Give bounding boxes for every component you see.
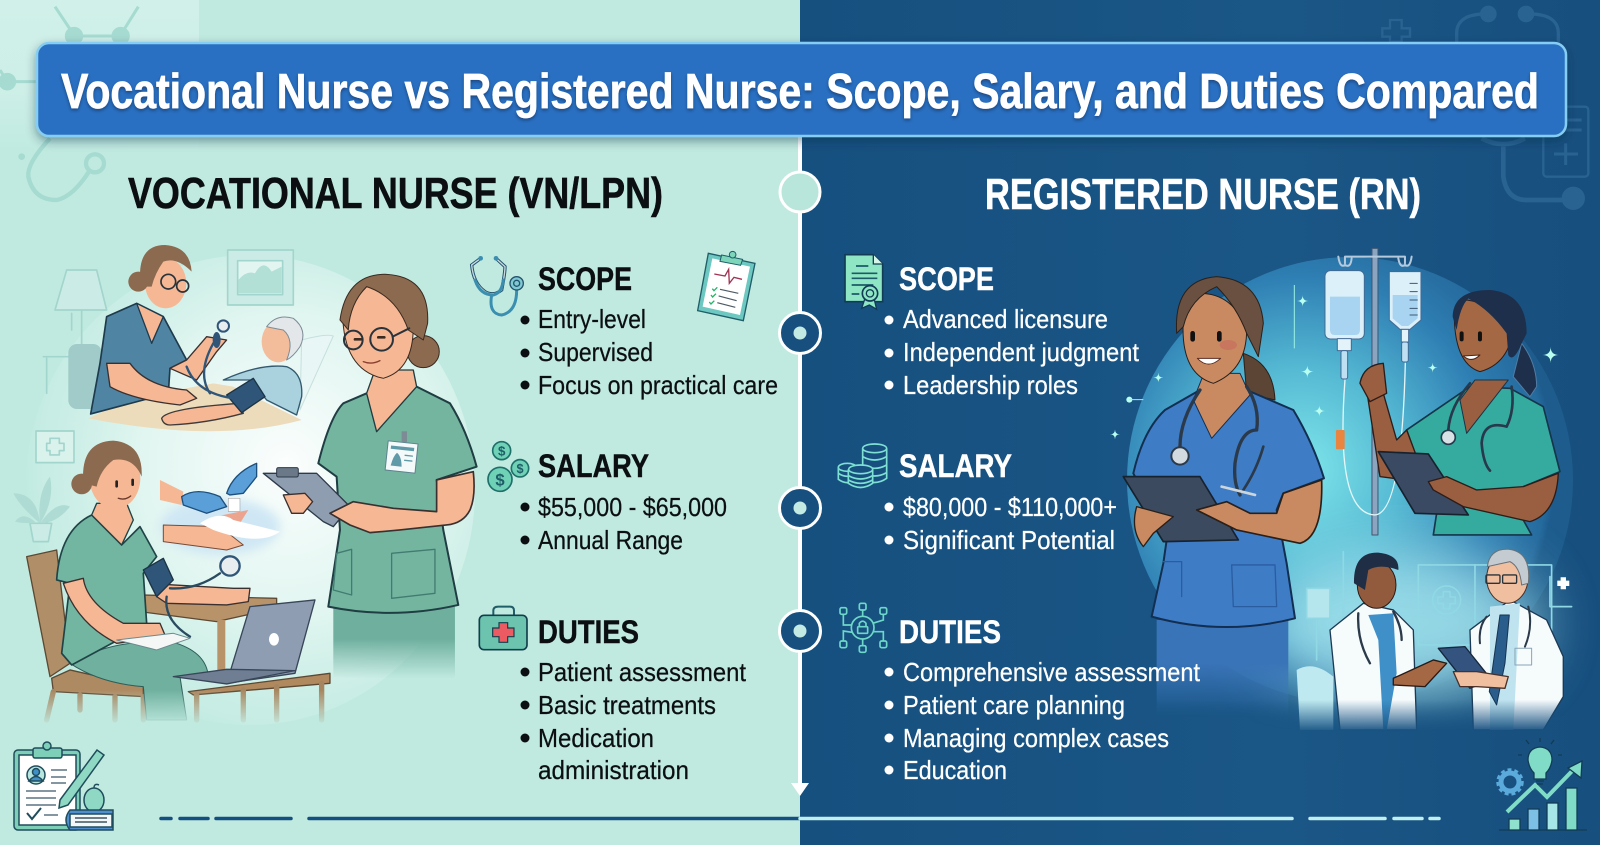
right section: salary	[884, 448, 1117, 555]
right section: salary: SALARY	[899, 448, 1012, 484]
bottom scene: seated nurse with laptop	[27, 441, 330, 720]
title banner	[37, 43, 1566, 136]
timeline node: heading	[780, 172, 820, 212]
background decoration: right faint stethoscope and clipboard	[1382, 7, 1588, 208]
right illustration: RN team with IV stand	[1110, 248, 1573, 730]
right section: duties: Education	[903, 755, 1007, 785]
left section: scope: SCOPE	[538, 261, 632, 297]
left section: salary: SALARY	[538, 448, 649, 484]
right section: duties: Comprehensive assessment	[903, 657, 1201, 687]
right section: duties: DUTIES	[899, 614, 1001, 650]
left illustration: nurses providing practical care	[13, 245, 477, 725]
left section: salary: Annual Range	[538, 525, 683, 555]
timeline node: salary	[780, 488, 820, 528]
right section: scope: Independent judgment	[903, 337, 1140, 367]
left section: scope	[520, 261, 778, 400]
left section: duties: Patient assessment	[538, 657, 747, 687]
left section: duties: administration	[538, 755, 689, 785]
right section: scope: Advanced licensure	[903, 304, 1108, 334]
right section: duties	[884, 614, 1201, 785]
left section: duties	[520, 614, 747, 785]
icon: coins	[488, 442, 529, 491]
icon: coins: $	[495, 470, 505, 489]
IV pole and bags	[1297, 248, 1421, 730]
icon: growth chart with bulb and gear	[1498, 738, 1587, 830]
left section: scope: Focus on practical care	[538, 370, 778, 400]
doctors	[1330, 549, 1563, 730]
left section: duties: Medication	[538, 723, 654, 753]
big standing nurse	[263, 274, 477, 678]
timeline node: scope	[780, 312, 820, 354]
right section: duties: Managing complex cases	[903, 723, 1169, 753]
faded room decor	[13, 250, 293, 542]
sparkles	[1110, 285, 1569, 589]
timeline node: duties	[780, 610, 820, 652]
icon: coins: $	[516, 462, 524, 476]
left section: scope: Supervised	[538, 337, 653, 367]
icon: stethoscope	[472, 256, 523, 315]
heading: vocational nurse: VOCATIONAL NURSE (VN/LPN)	[128, 169, 663, 218]
top scene: nurse checks blood pressure	[68, 245, 333, 431]
background decoration: left faint stethoscope	[0, 0, 199, 200]
faint clinic backdrop	[1307, 552, 1572, 670]
footer rule: left dashes	[161, 817, 800, 820]
right section: scope: SCOPE	[899, 261, 994, 297]
left section: scope: Entry-level	[538, 304, 646, 334]
heading: registered nurse: REGISTERED NURSE (RN)	[985, 170, 1421, 219]
left section: salary	[520, 448, 727, 555]
big nurse in blue scrubs	[1123, 277, 1324, 717]
left section: salary: $55,000 - $65,000	[538, 492, 727, 522]
icon: network with lock	[840, 603, 887, 652]
second nurse in teal scrubs	[1360, 290, 1560, 535]
right section: salary: Significant Potential	[903, 525, 1115, 555]
left section: duties: Basic treatments	[538, 690, 716, 720]
right section: duties: Patient care planning	[903, 690, 1125, 720]
icon: clipboard with heartbeat	[698, 251, 755, 321]
right section: scope: Leadership roles	[903, 370, 1078, 400]
icon: coins: $	[498, 444, 506, 459]
footer rule: right dashes	[800, 817, 1439, 820]
icon: certificate document	[845, 255, 883, 309]
middle scene: wound dressing	[160, 463, 280, 555]
left section: duties: DUTIES	[538, 614, 639, 650]
icon: first aid kit	[479, 607, 527, 650]
icon: coin stacks	[838, 444, 887, 487]
panel: right background	[800, 0, 1600, 845]
right section: scope	[884, 261, 1140, 400]
icon: clipboard, pencil, apple and book	[14, 742, 113, 830]
right section: salary: $80,000 - $110,000+	[903, 492, 1117, 522]
panel: left background	[0, 0, 800, 845]
center divider with arrow	[791, 137, 809, 796]
